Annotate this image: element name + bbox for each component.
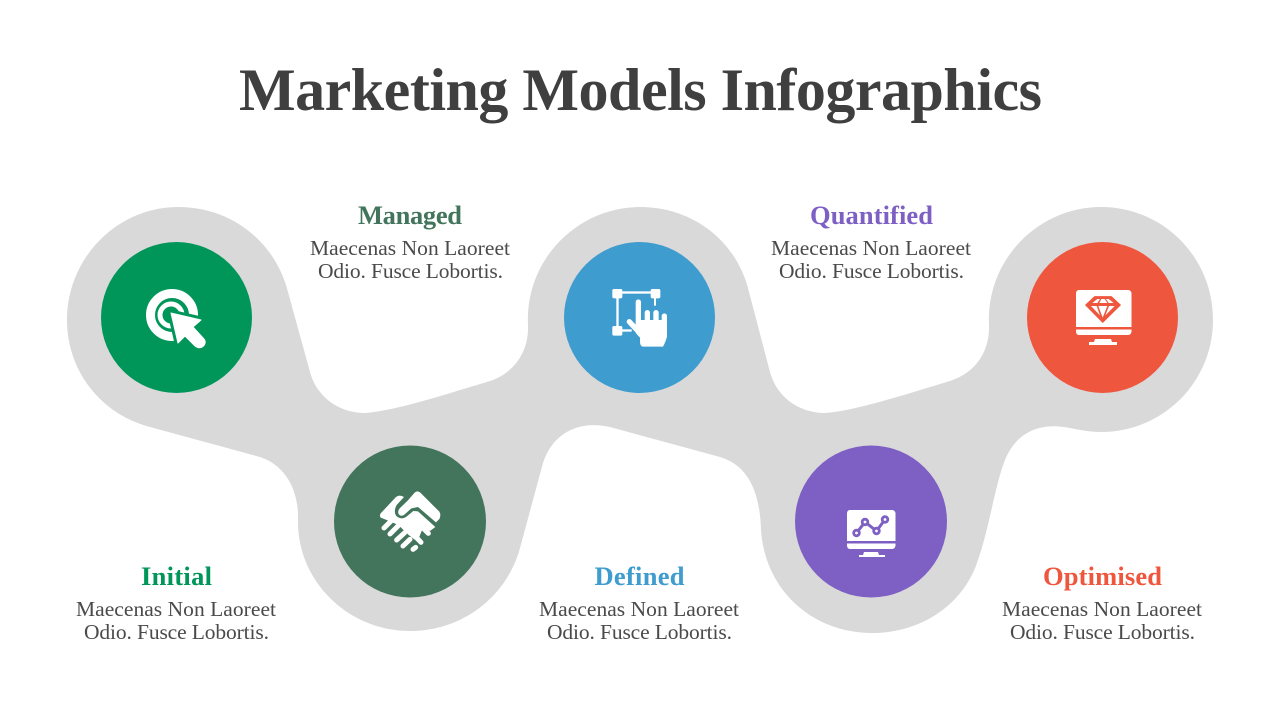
circle: Defined bbox=[564, 242, 715, 393]
icon: target and cursor bbox=[150, 294, 205, 348]
icon: monitor with line chart bbox=[847, 510, 896, 557]
description: Optimised: Odio. Fusce Lobortis. bbox=[1010, 620, 1195, 644]
description: Initial: Maecenas Non Laoreet bbox=[76, 597, 276, 621]
description: Initial bbox=[76, 597, 276, 644]
description: Quantified bbox=[771, 236, 971, 283]
description: Initial: Odio. Fusce Lobortis. bbox=[84, 620, 269, 644]
grey connecting band bbox=[67, 207, 1213, 633]
description: Quantified: Maecenas Non Laoreet bbox=[771, 236, 971, 260]
step: Managed bbox=[310, 200, 510, 598]
heading: Initial: Initial bbox=[141, 561, 212, 591]
circle: Optimised bbox=[1027, 242, 1178, 393]
heading: Optimised: Optimised bbox=[1043, 561, 1162, 591]
icon: hand selecting square bbox=[612, 289, 667, 347]
circle: Managed bbox=[334, 446, 486, 598]
description: Optimised bbox=[1002, 597, 1202, 644]
description: Defined: Odio. Fusce Lobortis. bbox=[547, 620, 732, 644]
description: Managed: Maecenas Non Laoreet bbox=[310, 236, 510, 260]
circle: Quantified bbox=[795, 446, 947, 598]
step: Quantified bbox=[771, 200, 971, 598]
step: Optimised bbox=[1002, 242, 1202, 644]
description: Quantified: Odio. Fusce Lobortis. bbox=[779, 259, 964, 283]
heading: Quantified: Quantified bbox=[810, 200, 933, 230]
description: Defined: Maecenas Non Laoreet bbox=[539, 597, 739, 621]
description: Managed: Odio. Fusce Lobortis. bbox=[318, 259, 503, 283]
step: Initial bbox=[76, 242, 276, 644]
title: Marketing Models Infographics bbox=[239, 57, 1042, 123]
heading: Defined: Defined bbox=[594, 561, 685, 591]
step: Defined bbox=[539, 242, 739, 644]
diamond bbox=[1086, 297, 1120, 322]
circle: Initial bbox=[101, 242, 252, 393]
description: Managed bbox=[310, 236, 510, 283]
description: Defined bbox=[539, 597, 739, 644]
description: Optimised: Maecenas Non Laoreet bbox=[1002, 597, 1202, 621]
icon: handshake bbox=[380, 491, 440, 549]
heading: Managed: Managed bbox=[358, 200, 462, 230]
icon: monitor with diamond bbox=[1076, 290, 1132, 345]
